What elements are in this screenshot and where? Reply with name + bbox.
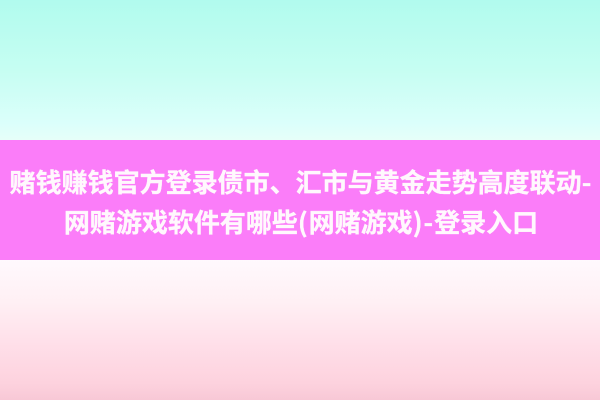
title: 网赌游戏软件有哪些(网赌游戏)-登录入口 <box>64 203 538 240</box>
background: bottom pink gradient <box>0 260 600 400</box>
panel: magenta title band <box>0 140 600 260</box>
title: 赌钱赚钱官方登录债市、汇市与黄金走势高度联动- <box>10 163 592 200</box>
title <box>10 163 592 240</box>
background: top cyan gradient <box>0 0 600 140</box>
